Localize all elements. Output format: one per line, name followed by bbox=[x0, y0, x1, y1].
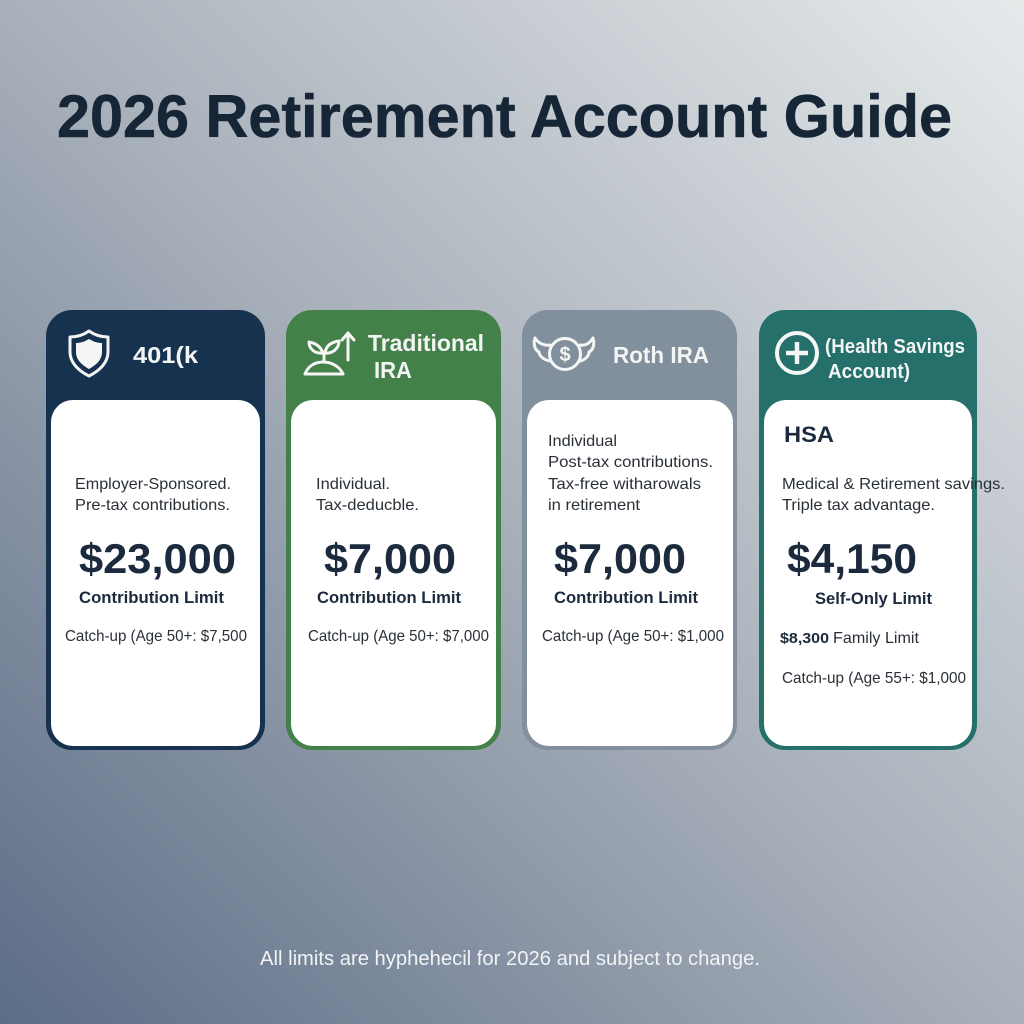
HSA limit label: Self-Only Limit bbox=[815, 590, 932, 608]
panel: 401(k) bbox=[46, 310, 265, 750]
icon: winged dollar coin bbox=[534, 338, 594, 370]
Traditional IRA catch-up: Catch-up (Age 50+: $7,000 bbox=[308, 628, 489, 645]
401(k) description: Employer-Sponsored. bbox=[75, 476, 231, 493]
401(k) description: Pre-tax contributions. bbox=[75, 497, 230, 514]
panel: Roth IRA bbox=[522, 310, 737, 750]
icon: medical plus bbox=[777, 333, 817, 373]
HSA white body bbox=[764, 400, 972, 746]
401(k) heading: 401(k bbox=[133, 342, 198, 368]
HSA family limit: Family Limit bbox=[833, 630, 920, 647]
title: 2026 Retirement Account Guide bbox=[57, 83, 952, 150]
Traditional IRA heading: Traditional bbox=[368, 330, 484, 356]
HSA family limit: $8,300 bbox=[780, 630, 829, 647]
Traditional IRA heading: IRA bbox=[374, 357, 412, 383]
HSA catch-up: Catch-up (Age 55+: $1,000 bbox=[782, 670, 966, 687]
Roth IRA description: Individual bbox=[548, 433, 617, 450]
HSA heading: (Health Savings bbox=[825, 335, 965, 358]
HSA description: Triple tax advantage. bbox=[782, 497, 935, 514]
panel: HSA bbox=[759, 310, 1005, 750]
HSA family limit bbox=[780, 630, 920, 647]
Traditional IRA limit label: Contribution Limit bbox=[317, 589, 462, 607]
HSA heading bbox=[825, 335, 965, 383]
401(k) description bbox=[75, 476, 231, 514]
Traditional IRA heading bbox=[368, 330, 484, 383]
401(k) limit amount: $23,000 bbox=[79, 535, 236, 582]
Roth IRA limit label: Contribution Limit bbox=[554, 589, 699, 607]
Traditional IRA description: Individual. bbox=[316, 476, 390, 493]
HSA sub-heading: HSA bbox=[784, 422, 834, 447]
Roth IRA description bbox=[548, 433, 713, 514]
HSA description bbox=[782, 476, 1005, 514]
Traditional IRA limit amount: $7,000 bbox=[324, 535, 456, 582]
panel: Traditional IRA bbox=[286, 310, 501, 750]
Traditional IRA white body bbox=[291, 400, 496, 746]
Traditional IRA description: Tax-deducble. bbox=[316, 497, 419, 514]
Roth IRA catch-up: Catch-up (Age 50+: $1,000 bbox=[542, 628, 724, 645]
Roth IRA description: Post-tax contributions. bbox=[548, 454, 713, 471]
icon: shield bbox=[70, 331, 108, 376]
Traditional IRA description bbox=[316, 476, 419, 514]
401(k) card frame bbox=[46, 310, 265, 750]
HSA card frame bbox=[759, 310, 977, 750]
icon: sprout with arrow bbox=[305, 333, 354, 374]
HSA heading: Account) bbox=[828, 360, 910, 383]
Roth IRA white body bbox=[527, 400, 733, 746]
401(k) limit label: Contribution Limit bbox=[79, 589, 225, 607]
401(k) white body bbox=[51, 400, 260, 746]
401(k) catch-up: Catch-up (Age 50+: $7,500 bbox=[65, 628, 247, 645]
HSA limit amount: $4,150 bbox=[787, 535, 917, 582]
Roth IRA card frame bbox=[522, 310, 737, 750]
footer note: All limits are hyphehecil for 2026 and subject to change. bbox=[260, 948, 760, 970]
icon: winged dollar coin: $ bbox=[559, 344, 571, 366]
HSA description: Medical & Retirement savings. bbox=[782, 476, 1005, 493]
Roth IRA description: in retirement bbox=[548, 497, 641, 514]
Roth IRA heading: Roth IRA bbox=[613, 342, 709, 368]
Roth IRA description: Tax-free witharowals bbox=[548, 476, 701, 493]
Traditional IRA card frame bbox=[286, 310, 501, 750]
Roth IRA limit amount: $7,000 bbox=[554, 535, 686, 582]
